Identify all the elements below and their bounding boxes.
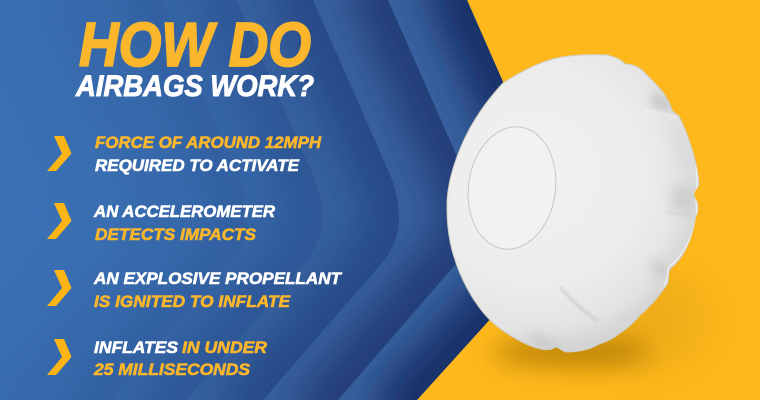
airbag shadow: [492, 270, 710, 370]
icon: chevron 1: [47, 136, 72, 171]
title: HOW DO: [79, 11, 311, 80]
bullet 4 text: 25 MILLISECONDS: [93, 360, 251, 379]
bullet 1: [47, 133, 322, 175]
icon: chevron 3: [47, 270, 72, 306]
bullet 3 text: IS IGNITED TO INFLATE: [94, 292, 291, 311]
bullet 1 text: [95, 133, 322, 175]
illustration: inflated airbag: [447, 55, 699, 352]
bullet 1 text: FORCE OF AROUND 12MPH: [95, 133, 322, 152]
bullet 4 text: [93, 338, 268, 379]
airbag centre panel seam: [460, 121, 564, 255]
bullet 2 text: AN ACCELEROMETER: [93, 202, 276, 221]
bullet 4 text: IN UNDER: [182, 338, 268, 357]
bullet 4 text: INFLATES: [94, 338, 179, 357]
bullet 3 text: [93, 269, 343, 311]
icon: chevron 2: [47, 203, 72, 239]
title: [75, 11, 314, 103]
background: blue layered chevron panel: [0, 0, 504, 400]
bullet 2 text: DETECTS IMPACTS: [95, 225, 257, 244]
title: AIRBAGS WORK?: [75, 70, 314, 103]
bullet 2 text: [93, 202, 276, 244]
icon: chevron 4: [47, 339, 72, 375]
bullet 3 text: AN EXPLOSIVE PROPELLANT: [93, 269, 343, 288]
bullet 4: [47, 338, 268, 379]
bullet 3: [47, 269, 343, 311]
bullet 2: [47, 202, 276, 244]
bullet 1 text: REQUIRED TO ACTIVATE: [95, 156, 300, 175]
